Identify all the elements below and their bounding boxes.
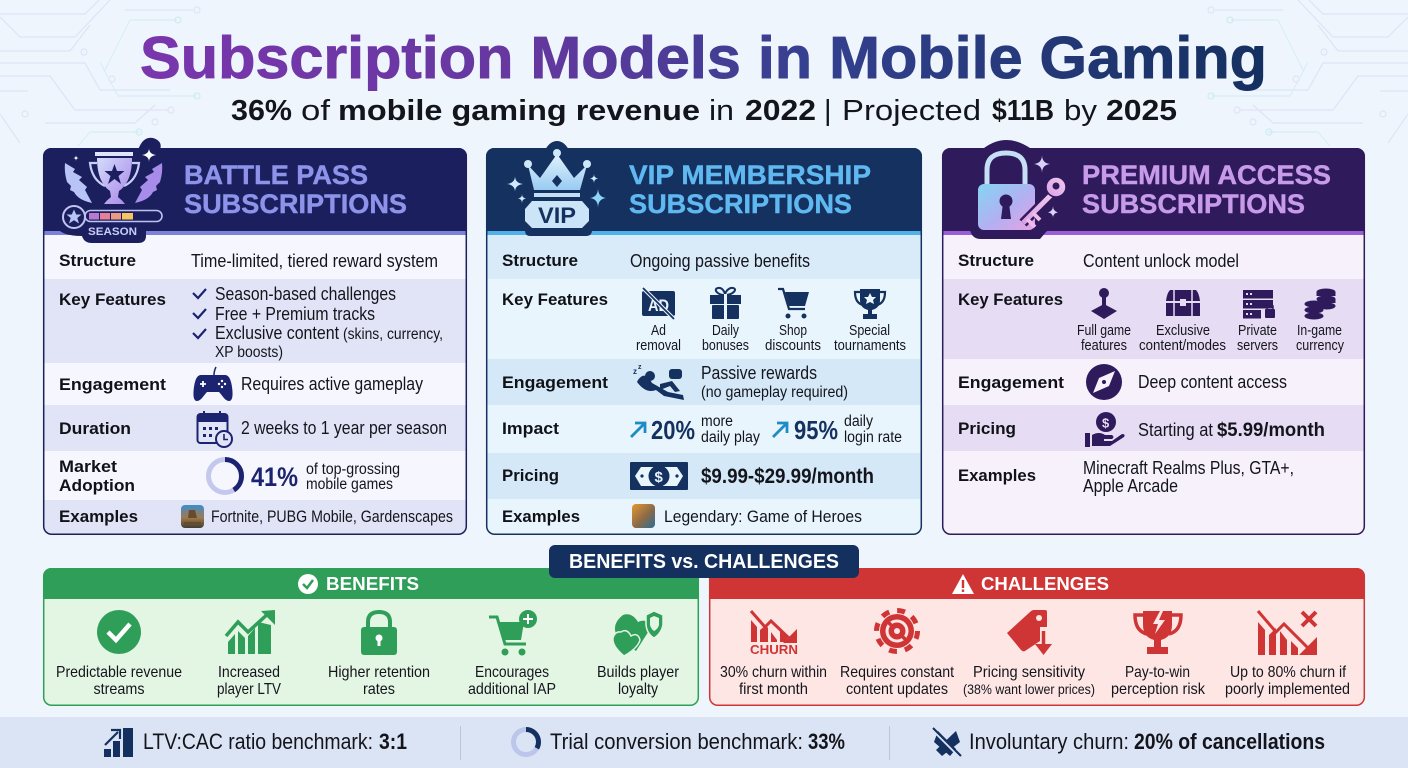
row: structure [958, 251, 1239, 271]
row: key features: currency [1296, 338, 1345, 354]
heading: vip: VIP MEMBERSHIP [629, 160, 871, 190]
row: structure: Structure [59, 251, 136, 270]
row: market adoption: of top-grossing [306, 461, 400, 478]
panel: benefits [43, 568, 699, 706]
row: key features: Daily [712, 323, 740, 339]
icon: trophy season emblem: SEASON [88, 226, 137, 238]
row: key features: Exclusive content [215, 323, 339, 343]
stat: ltv cac: LTV:CAC ratio benchmark: [143, 729, 373, 754]
subtitle: 2025 [1106, 95, 1177, 127]
challenge: poor implementation: Up to 80% churn if [1230, 664, 1346, 681]
benefit: retention [328, 612, 430, 698]
icon: banknote [630, 462, 688, 490]
challenge: pricing sensitivity [963, 610, 1095, 697]
row: engagement [502, 363, 848, 401]
subtitle: by [1064, 95, 1098, 127]
subtitle: 36% [231, 95, 292, 127]
row: examples: Minecraft Realms Plus, GTA+, [1083, 458, 1294, 478]
challenge: pay-to-win [1111, 611, 1206, 698]
icon: banknote: $ [654, 469, 664, 486]
icon: vip crown [507, 141, 606, 236]
row: impact: more [701, 413, 733, 430]
subtitle: mobile gaming revenue [338, 95, 700, 127]
subtitle [231, 95, 1177, 127]
row: key features: servers [1237, 338, 1278, 354]
panel: premium access [942, 140, 1365, 535]
row: market adoption: mobile games [306, 476, 393, 493]
heading: premium: SUBSCRIPTIONS [1082, 189, 1305, 219]
stat: trial conversion: 33% [808, 729, 845, 754]
panel: vip membership [486, 141, 922, 535]
row: key features: bonuses [702, 338, 749, 354]
icon: special trophy [855, 289, 885, 319]
row: examples: Legendary: Game of Heroes [664, 508, 862, 526]
row: impact [502, 413, 902, 446]
heading: challenges: CHALLENGES [981, 574, 1109, 594]
row: key features [958, 288, 1345, 354]
row: key features: (skins, currency, [343, 326, 443, 343]
row: key features: Full game [1077, 323, 1131, 339]
benefit: retention: rates [363, 681, 395, 698]
row: examples: Examples [502, 507, 580, 526]
challenge: pricing sensitivity: Pricing sensitivity [973, 664, 1085, 681]
circuit pattern left [0, 0, 200, 146]
icon: server [1243, 290, 1275, 318]
row: structure [502, 251, 810, 271]
row: structure: Structure [502, 251, 578, 270]
stat: involuntary churn: Involuntary churn: [969, 729, 1129, 754]
row: examples [958, 458, 1294, 496]
subtitle: $11B [992, 95, 1054, 127]
benefit: loyalty: Builds player [597, 664, 680, 681]
challenges background [709, 568, 1365, 706]
icon: coins [1304, 288, 1336, 320]
circuit pattern right [1208, 0, 1408, 146]
row: key features: Key Features [59, 290, 166, 309]
panel: challenges [709, 568, 1365, 706]
subtitle: 2022 [745, 95, 816, 127]
row: key features: content/modes [1139, 338, 1226, 354]
subtitle: Projected [842, 95, 981, 127]
heading: vip: SUBSCRIPTIONS [629, 189, 852, 219]
row: key features: Ad [651, 323, 666, 339]
icon: ad removal: AD [648, 296, 669, 315]
row: key features: Special [849, 323, 890, 339]
premium rows [942, 148, 1365, 451]
row: examples [59, 505, 453, 528]
row: pricing: Starting at [1138, 420, 1213, 440]
challenge: pay-to-win: perception risk [1111, 681, 1206, 698]
row: engagement [958, 364, 1287, 400]
row: pricing: $9.99-$29.99/month [701, 465, 874, 488]
subtitle: of [301, 95, 331, 127]
row: pricing: Pricing [502, 466, 559, 485]
row: impact: Impact [502, 419, 559, 438]
icon: vip crown: VIP [538, 203, 576, 228]
row: key features [502, 288, 906, 354]
benefit: loyalty [597, 611, 680, 698]
row: duration: Duration [59, 419, 131, 438]
benefit: iap: additional IAP [468, 681, 556, 698]
icon: compass [1086, 364, 1122, 400]
icon: cart [778, 289, 809, 318]
subtitle: | [824, 95, 832, 127]
row: impact: 20% [651, 415, 695, 445]
icon: resting player: z [633, 367, 637, 376]
icon: ad removal [642, 288, 675, 319]
row: key features: Free + Premium tracks [215, 304, 375, 324]
heading: premium [1082, 160, 1331, 219]
row: key features: Key Features [502, 290, 608, 309]
icon: hand with coin [1085, 412, 1125, 447]
heading: benefits: BENEFITS [326, 574, 419, 594]
benefit: player ltv: Increased [218, 664, 280, 681]
row: examples: Examples [59, 507, 138, 526]
challenge: content updates: Requires constant [840, 664, 954, 681]
row: impact: daily [844, 413, 873, 430]
icon: gift [710, 288, 741, 320]
heading: battle pass: SUBSCRIPTIONS [184, 189, 407, 219]
row: engagement: Passive rewards [701, 363, 817, 383]
icon: resting player: z [638, 364, 642, 371]
row: market adoption: 41% [251, 462, 298, 492]
row: pricing: $5.99/month [1217, 419, 1325, 441]
row: key features: tournaments [834, 338, 906, 354]
benefit: iap: Encourages [475, 664, 549, 681]
row: key features: Private [1238, 323, 1277, 339]
stat: involuntary churn: 20% of cancellations [1134, 729, 1325, 754]
battle pass rows [43, 148, 467, 535]
challenge: poor implementation [1225, 611, 1350, 698]
row: engagement [59, 367, 423, 401]
benefit: loyalty: loyalty [618, 681, 658, 698]
row: key features: removal [636, 338, 681, 354]
title: Subscription Models in Mobile Gaming [140, 25, 1267, 91]
row: structure: Ongoing passive benefits [630, 251, 810, 271]
row: examples [502, 504, 862, 528]
row: engagement: (no gameplay required) [701, 384, 848, 401]
row: impact: 95% [794, 415, 838, 445]
row: impact: login rate [844, 429, 902, 446]
icon: chest [1166, 290, 1200, 316]
row: structure: Structure [958, 251, 1034, 270]
row: key features: discounts [765, 338, 821, 354]
footer band [0, 717, 1408, 768]
row: examples: Apple Arcade [1083, 476, 1178, 496]
challenge: poor implementation: poorly implemented [1225, 681, 1350, 698]
icon: trophy season emblem [56, 138, 168, 243]
icon: joystick [1091, 288, 1117, 319]
row: key features: features [1081, 338, 1127, 354]
row: impact: daily play [701, 429, 760, 446]
heading: premium: PREMIUM ACCESS [1082, 160, 1331, 190]
row: market adoption: Market [59, 457, 117, 476]
benefit: player ltv [217, 610, 281, 698]
icon: resting player [633, 364, 684, 400]
row: key features: Key Features [958, 290, 1063, 309]
heading: battle pass: BATTLE PASS [184, 160, 368, 190]
benefit: player ltv: player LTV [217, 681, 281, 698]
challenge: churn: first month [739, 681, 808, 698]
benefits background [43, 568, 699, 706]
challenge: churn [720, 611, 827, 698]
row: pricing: Pricing [958, 419, 1016, 438]
benefit: predictable revenue: streams [94, 681, 144, 698]
heading: battle pass [184, 160, 407, 219]
row: engagement: Deep content access [1138, 372, 1287, 392]
row: duration [59, 411, 447, 447]
row: key features: Season-based challenges [215, 284, 396, 304]
row: examples: Fortnite, PUBG Mobile, Gardenscapes [211, 508, 453, 526]
icon: hand with coin: $ [1102, 416, 1110, 430]
row: structure [59, 251, 438, 271]
row: duration: 2 weeks to 1 year per season [241, 418, 447, 438]
row: market adoption [59, 457, 400, 495]
banner: benefits vs challenges [549, 545, 859, 578]
banner: benefits vs challenges: BENEFITS vs. CHALLENGES [569, 551, 839, 573]
benefit: retention: Higher retention [328, 664, 430, 681]
challenge: content updates: content updates [846, 681, 948, 698]
benefit: predictable revenue [56, 610, 182, 698]
challenge: pay-to-win: Pay-to-win [1125, 664, 1190, 681]
challenge: pricing sensitivity: (38% want lower prices) [963, 682, 1095, 697]
row: structure: Content unlock model [1083, 251, 1239, 271]
challenge: content updates [840, 610, 954, 698]
challenge: churn: CHURN [750, 642, 798, 657]
row: structure: Time-limited, tiered reward system [191, 251, 438, 271]
subtitle: in [709, 95, 734, 127]
row: key features: Exclusive [1156, 323, 1210, 339]
benefit: iap [468, 610, 556, 698]
stat: ltv cac: 3:1 [379, 729, 407, 754]
heading: vip [629, 160, 871, 219]
vip rows [486, 148, 922, 535]
stat: trial conversion: Trial conversion benchmark: [550, 729, 803, 754]
row: key features [59, 284, 443, 361]
challenge: churn: 30% churn within [720, 664, 827, 681]
row: market adoption: Adoption [59, 476, 135, 495]
row: key features: In-game [1297, 323, 1342, 339]
benefit: predictable revenue: Predictable revenue [56, 664, 182, 681]
row: engagement: Engagement [502, 373, 608, 392]
row: engagement: Engagement [958, 373, 1064, 392]
row: pricing [502, 462, 874, 490]
row: key features: XP boosts) [215, 344, 283, 361]
stat: involuntary churn [933, 728, 1325, 757]
row: examples: Examples [958, 466, 1036, 485]
row: pricing [958, 412, 1325, 447]
row: key features: Shop [779, 323, 807, 339]
row: engagement: Requires active gameplay [241, 374, 423, 394]
row: engagement: Engagement [59, 375, 166, 394]
panel: battle pass [43, 138, 467, 535]
icon: lock and key [970, 140, 1070, 239]
